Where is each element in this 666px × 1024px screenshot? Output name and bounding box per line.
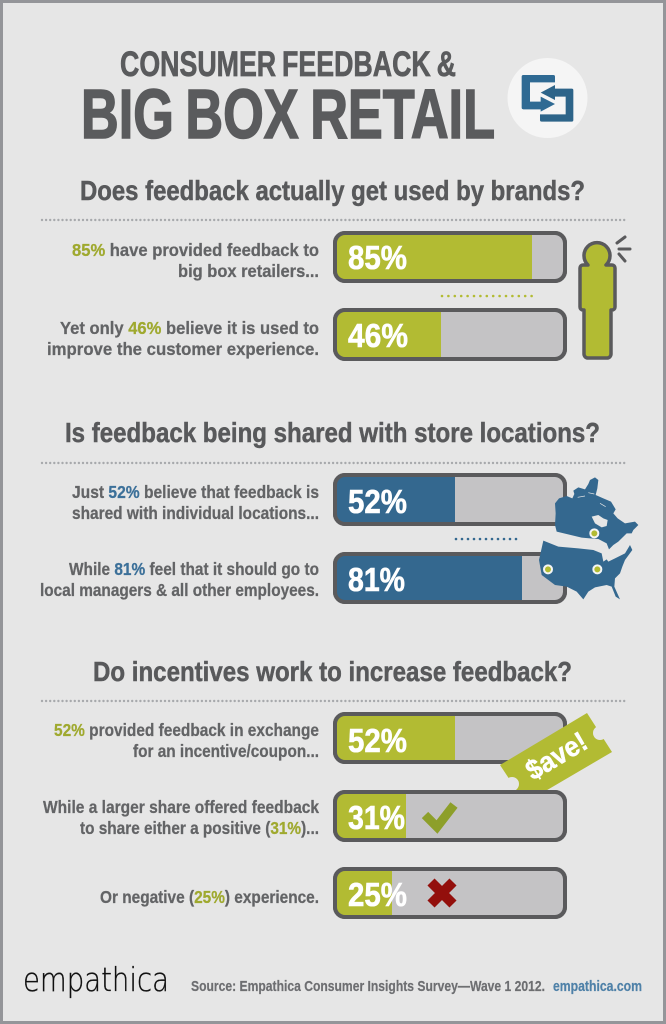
icon: check mark — [425, 805, 454, 827]
icon: person — [580, 237, 630, 358]
heading: section 1: Does feedback actually get used by brands? — [80, 175, 585, 206]
text: 81% local managers: While 81% feel that it should go to — [69, 559, 319, 579]
text: 85% provided feedback: big box retailers... — [178, 261, 319, 281]
bar: 85%: 85% — [348, 239, 407, 276]
source line: empathica.com — [553, 978, 642, 995]
text: 52% shared with locations — [72, 482, 319, 523]
bar: 52% blue: 52% — [348, 483, 407, 520]
text: 85% provided feedback — [72, 240, 319, 281]
bar: 31%: 31% — [348, 799, 405, 836]
bar: 52% blue — [335, 475, 565, 524]
bar: 46%: 46% — [348, 317, 408, 354]
title: CONSUMER FEEDBACK & — [120, 45, 456, 84]
bar: 46% — [335, 310, 565, 359]
icon: red cross — [431, 882, 453, 904]
text: 25% negative: Or negative (25%) experience. — [100, 887, 319, 907]
title: BIG BOX RETAIL — [81, 75, 495, 153]
text: 31% positive: While a larger share offered feedback — [43, 797, 319, 817]
bar: 85% — [335, 233, 565, 281]
text: 81% local managers — [40, 559, 319, 600]
heading: section 3: Do incentives work to increase feedback? — [93, 656, 572, 687]
text: 31% positive — [43, 797, 319, 838]
title — [81, 45, 495, 153]
icon: map of North America — [539, 477, 638, 599]
text: 81% local managers: local managers & all other employees. — [40, 580, 319, 600]
icon: save ticket — [500, 713, 612, 803]
bar: 31% — [335, 792, 565, 840]
text: 52% incentive — [54, 720, 319, 761]
text: 46% believe it is used: Yet only 46% believe it is used to — [60, 318, 319, 338]
text: 85% provided feedback: 85% have provided feedback to — [72, 240, 319, 260]
bar: 52% green: 52% — [348, 722, 407, 759]
text: 31% positive: to share either a positive (31%)... — [80, 818, 319, 838]
bar: 25% — [335, 869, 565, 917]
text: 52% shared with locations: shared with individual locations... — [72, 503, 319, 523]
text: 52% incentive: for an incentive/coupon... — [133, 741, 319, 761]
icon: feedback exchange logo — [508, 58, 588, 138]
bar: 81% blue: 81% — [348, 561, 405, 598]
source line: Source: Empathica Consumer Insights Survey—Wave 1 2012. — [191, 978, 545, 995]
text: 46% believe it is used — [47, 318, 319, 359]
icon: save ticket: $ave! — [520, 726, 593, 786]
text: 52% incentive: 52% provided feedback in exchange — [54, 720, 319, 740]
bar: 52% green — [335, 714, 565, 762]
logo: empathica: empathica — [23, 960, 169, 999]
text: 52% shared with locations: Just 52% believe that feedback is — [72, 482, 319, 502]
bar: 25%: 25% — [348, 876, 407, 913]
text: 46% believe it is used: improve the customer experience. — [47, 339, 319, 359]
bar: 81% blue — [335, 554, 565, 602]
